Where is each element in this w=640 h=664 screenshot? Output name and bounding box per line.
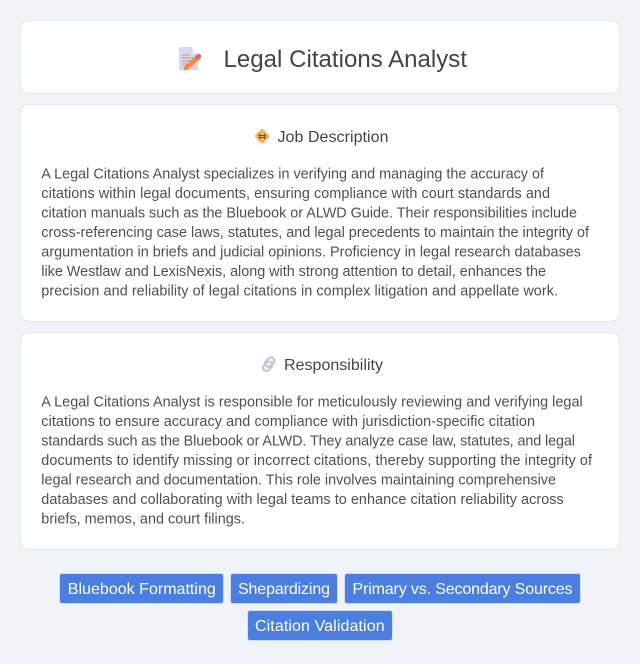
panel: title card <box>20 20 620 94</box>
tag: Citation Validation <box>248 610 392 640</box>
text block: job description: citation manuals such as the Bluebook or ALWD Guide. Their responsibilities include <box>41 206 577 222</box>
text block: responsibility: standards such as the Bluebook or ALWD. They analyze case law, statutes, and legal <box>41 434 575 450</box>
icon: chain link <box>262 356 276 372</box>
tag: Bluebook Formatting: Bluebook Formatting <box>68 581 216 598</box>
title: Legal Citations Analyst <box>224 46 467 73</box>
text block: responsibility: databases and collaborating with legal teams to enhance citation reliability across <box>41 492 564 508</box>
tag: Bluebook Formatting <box>60 574 224 604</box>
heading: responsibility: Responsibility <box>284 357 383 374</box>
tag: Shepardizing: Shepardizing <box>238 581 330 598</box>
panel: responsibility <box>20 332 620 550</box>
icon: orange diamond sign <box>254 128 270 144</box>
text block: job description: cross-referencing case laws, statutes, and legal precedents to maintain the integrity of <box>41 225 590 241</box>
text block: job description: A Legal Citations Analyst specializes in verifying and managing the accuracy of <box>41 166 545 182</box>
heading: job description: Job Description <box>278 129 388 146</box>
tag: Primary vs. Secondary Sources: Primary vs. Secondary Sources <box>352 581 572 598</box>
icon: document with pencil <box>179 47 201 70</box>
text block: job description: argumentation in briefs and judicial opinions. Proficiency in legal research databases <box>41 244 581 260</box>
text block: responsibility <box>41 394 593 528</box>
tag: Citation Validation: Citation Validation <box>255 618 385 635</box>
panel: job description <box>20 104 620 322</box>
text block: job description: precision and reliability of legal citations in complex litigation and appellate work. <box>41 284 558 300</box>
text block: responsibility: A Legal Citations Analyst is responsible for meticulously reviewing and verifying legal <box>41 394 583 410</box>
text block: job description <box>41 166 590 300</box>
tag: Shepardizing <box>230 574 338 604</box>
text block: responsibility: citations to ensure accuracy and compliance with jurisdiction-specific citation <box>41 414 535 430</box>
text block: job description: citations within legal documents, ensuring compliance with court standards and <box>41 186 550 202</box>
text block: job description: like Westlaw and LexisNexis, along with strong attention to detail, enhances the <box>41 264 546 280</box>
text block: responsibility: legal research and documentation. This role involves maintaining comprehensive <box>41 472 556 488</box>
tag: Primary vs. Secondary Sources <box>344 574 580 604</box>
text block: responsibility: documents to identify missing or incorrect citations, thereby supporting the integrity of <box>41 453 593 469</box>
text block: responsibility: briefs, memos, and court filings. <box>41 512 245 528</box>
